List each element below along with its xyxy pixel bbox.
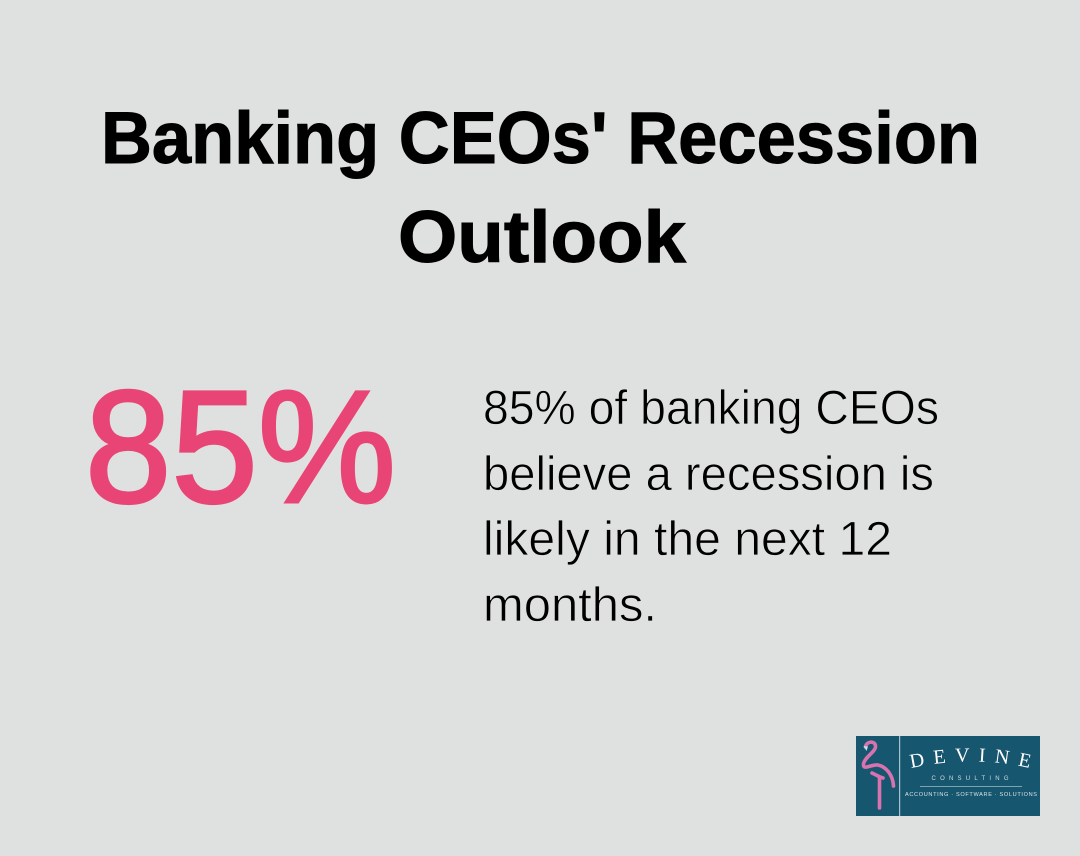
tagline: ACCOUNTING · SOFTWARE · SOLUTIONS [905, 792, 1037, 798]
description text [483, 382, 939, 632]
title [101, 98, 980, 278]
description text: months. [483, 579, 657, 632]
divider [899, 736, 900, 816]
description text: believe a recession is [483, 448, 934, 501]
big statistic: 85%: 85% [85, 357, 396, 536]
title: Outlook [398, 197, 686, 278]
description text: likely in the next 12 [483, 513, 892, 566]
logo: Devine Consulting [856, 736, 1040, 816]
title: Banking CEOs' Recession [101, 98, 980, 179]
wordmark: DEVINE [909, 748, 1030, 768]
subtitle: consulting: CONSULTING [932, 776, 1009, 782]
description text: 85% of banking CEOs [483, 382, 939, 435]
icon: flamingo [863, 742, 894, 808]
